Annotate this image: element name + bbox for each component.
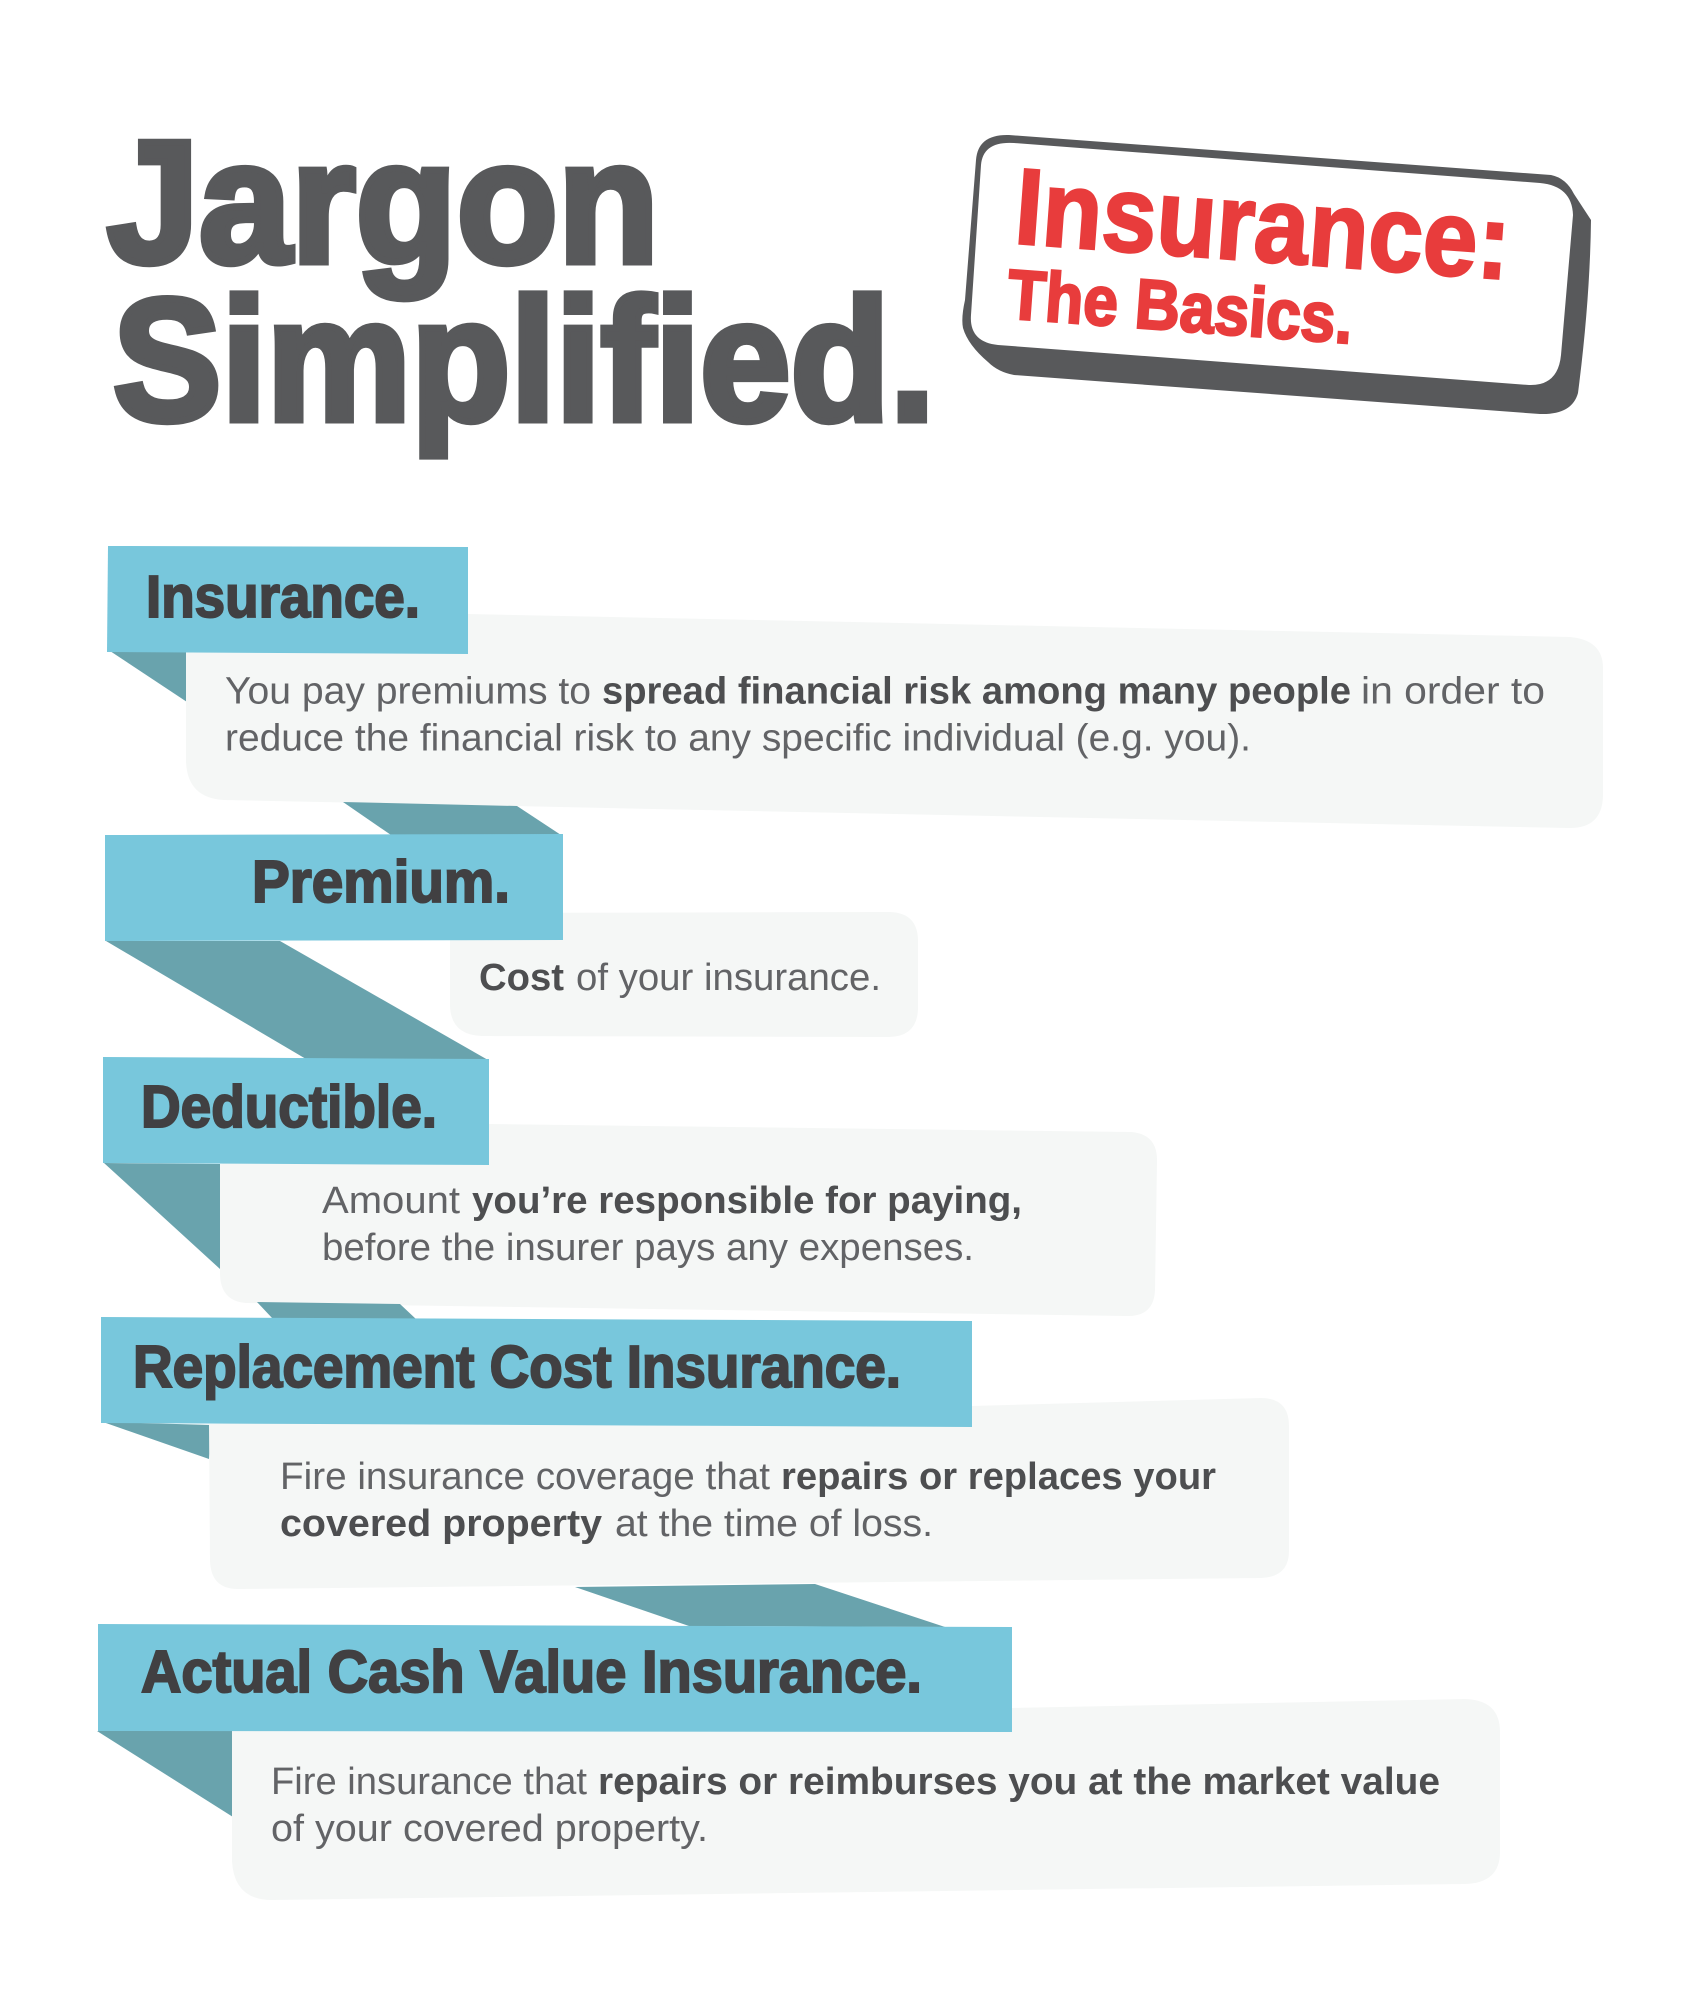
- badge subheading: The Basics.: [1005, 255, 1356, 358]
- ribbon fold: [104, 1163, 221, 1269]
- badge heading: Insurance:: [1011, 145, 1515, 302]
- definition text: of your covered property.: [271, 1808, 708, 1850]
- definition text: You pay premiums to: [225, 670, 591, 712]
- badge: Insurance: The Basics: [962, 135, 1591, 414]
- definition text: Fire insurance that: [271, 1761, 587, 1803]
- definition text: before the insurer pays any expenses.: [322, 1227, 974, 1269]
- definition text: in order to: [1361, 670, 1545, 712]
- heading ribbon: [101, 1317, 972, 1427]
- definition text: reduce the financial risk to any specific individual (e.g. you).: [225, 718, 1251, 760]
- panel: Premium: [105, 802, 918, 1060]
- badge shadow: [962, 135, 1591, 414]
- ribbon fold lower: [103, 1422, 212, 1459]
- definition text: spread financial risk among many people: [602, 670, 1351, 712]
- definition box: [209, 1398, 1289, 1589]
- definition text: of your insurance.: [576, 957, 881, 999]
- panel: Replacement Cost Insurance: [101, 1302, 1289, 1589]
- panel: Actual Cash Value Insurance: [97, 1584, 1500, 1900]
- ribbon fold: [110, 651, 188, 702]
- heading: Replacement Cost Insurance.: [133, 1334, 901, 1400]
- definition box: [232, 1699, 1500, 1900]
- badge face: [971, 143, 1573, 385]
- definition text: Fire insurance coverage that: [280, 1456, 770, 1498]
- title: Jargon: [107, 104, 659, 299]
- definition text: covered property: [280, 1503, 602, 1545]
- heading: Premium.: [252, 849, 510, 915]
- definition text: [225, 670, 1545, 760]
- heading ribbon: [107, 546, 468, 654]
- definition box: [220, 1124, 1157, 1316]
- definition text: repairs or replaces your: [781, 1456, 1216, 1498]
- ribbon fold lower: [97, 1731, 237, 1817]
- panel: Insurance: [107, 546, 1603, 828]
- definition text: [271, 1761, 1440, 1850]
- definition text: repairs or reimburses you at the market value: [598, 1761, 1440, 1803]
- ribbon fold lower: [106, 941, 488, 1060]
- ribbon fold upper: [343, 802, 561, 835]
- heading: Actual Cash Value Insurance.: [141, 1639, 922, 1705]
- panel: Deductible: [103, 1057, 1157, 1316]
- definition text: you’re responsible for paying,: [472, 1180, 1022, 1222]
- definition text: Amount: [322, 1180, 460, 1222]
- heading: Deductible.: [141, 1074, 437, 1140]
- definition box: [450, 912, 918, 1037]
- heading: Insurance.: [146, 564, 420, 630]
- definition text: Cost: [479, 957, 564, 999]
- title: [107, 104, 935, 457]
- definition text: [280, 1456, 1216, 1545]
- heading ribbon: [98, 1624, 1012, 1732]
- heading ribbon: [103, 1057, 489, 1165]
- definition text: [322, 1180, 1022, 1269]
- title: Simplified.: [113, 262, 935, 457]
- heading ribbon: [105, 834, 563, 941]
- ribbon fold upper: [575, 1584, 945, 1627]
- ribbon fold upper: [257, 1302, 417, 1320]
- definition box: [186, 610, 1603, 828]
- definition text: at the time of loss.: [615, 1503, 933, 1545]
